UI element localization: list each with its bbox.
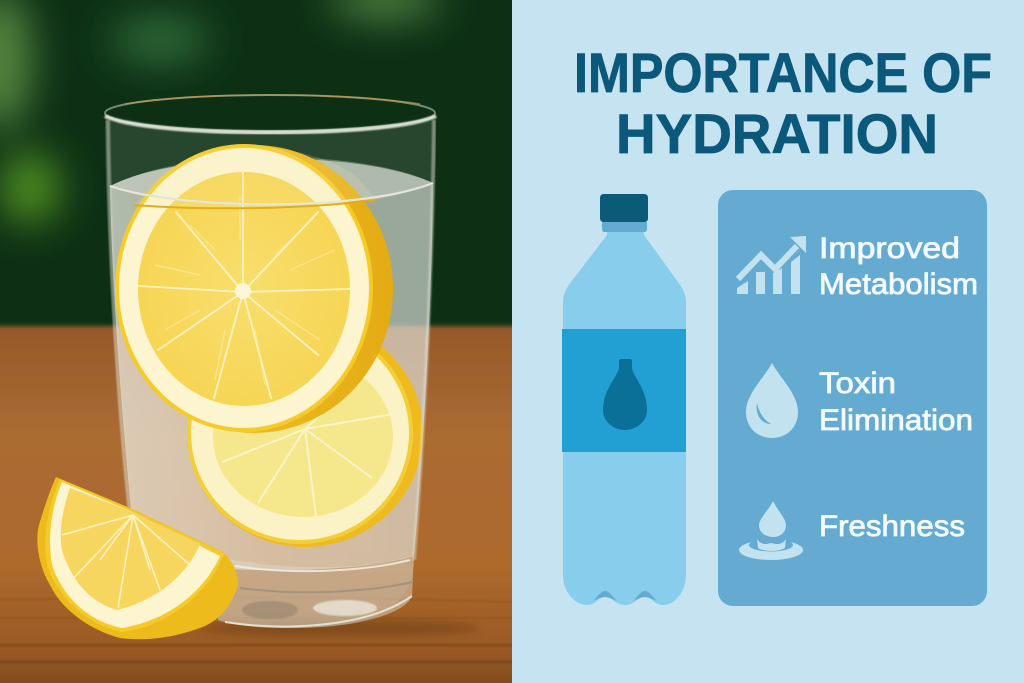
label: toxin elimination: [819, 367, 973, 437]
label: toxin elimination: Elimination: [819, 404, 973, 437]
lemon wedge: [37, 477, 238, 639]
front lemon slice: [115, 144, 393, 433]
label: toxin elimination: Toxin: [819, 367, 896, 400]
back lemon flesh: [213, 378, 393, 517]
icon: drop splash: [739, 501, 803, 560]
back lemon slice: [187, 346, 423, 547]
icon: water bottle: [562, 194, 686, 605]
photo: lemon water glass on a wooden table: [0, 0, 522, 683]
title: [574, 41, 992, 165]
wooden table: [0, 326, 522, 683]
icon: rising chart: [737, 236, 806, 294]
glass base: [216, 555, 414, 628]
glass shadow on the table: [200, 620, 480, 636]
blurred green foliage background: [0, 0, 512, 340]
bottle label drop: [603, 359, 647, 430]
label: improved metabolism: [819, 232, 978, 301]
water line: [110, 183, 433, 204]
lemon flesh with segments: [138, 172, 350, 406]
bottle label: [562, 329, 686, 452]
bottle body: [563, 232, 686, 605]
wedge flesh: [61, 488, 200, 610]
benefit: toxin elimination: [746, 363, 973, 438]
glass rim and highlights: [105, 95, 436, 560]
glass of water back layer: [105, 118, 436, 628]
bottle cap: [600, 194, 648, 222]
bottle base notches: [593, 591, 657, 601]
title: HYDRATION: [616, 102, 938, 165]
benefit: freshness: [739, 501, 965, 560]
label: freshness: Freshness: [819, 510, 965, 543]
glass refraction band on lemon: [133, 147, 375, 209]
icon: water drop: [746, 363, 798, 438]
benefit: improved metabolism: [737, 232, 978, 301]
bottle collar: [602, 222, 647, 232]
panel: benefits: [718, 190, 987, 606]
label: improved metabolism: Metabolism: [819, 268, 978, 301]
background: right panel: [512, 0, 1024, 683]
label: improved metabolism: Improved: [819, 232, 960, 265]
